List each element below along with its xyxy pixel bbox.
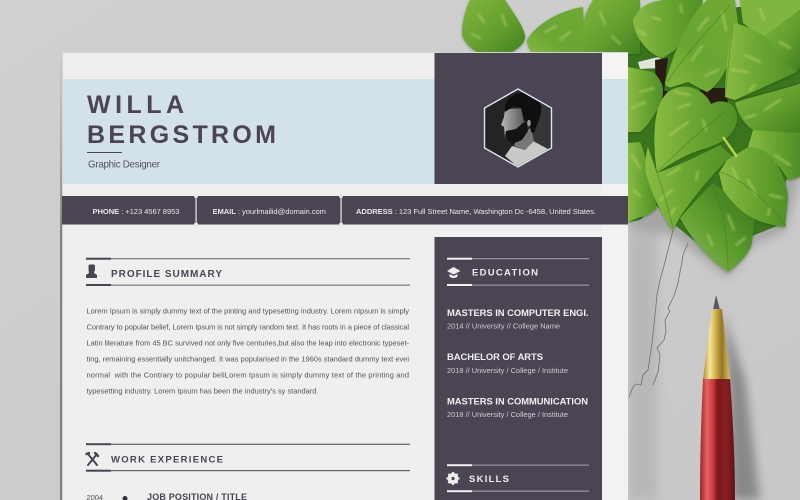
- photo panel: [434, 53, 602, 184]
- ear: [527, 120, 531, 126]
- hexagon portrait: [484, 89, 552, 167]
- icon: tools: [86, 453, 98, 465]
- timeline dot: [122, 496, 128, 500]
- soil: [655, 58, 728, 112]
- education entry 3: [447, 396, 588, 419]
- icon: person: [86, 264, 97, 278]
- section heading: work experience: WORK EXPERIENCE: [111, 454, 223, 466]
- leaf stem: [723, 137, 737, 157]
- header blue band: [63, 79, 628, 184]
- pen: [700, 295, 760, 500]
- name underline: [87, 152, 122, 153]
- section heading: skills: SKILLS: [469, 474, 509, 485]
- pen shadow: [722, 310, 760, 500]
- beard: [505, 122, 528, 144]
- section heading: work experience: [86, 443, 410, 472]
- profile paragraph: typesetting industry. Lorem Ipsum has been the industry's sy standard.: [86, 386, 318, 396]
- phone: PHONE : +123 4567 8953: [92, 207, 180, 216]
- section heading: education: EDUCATION: [472, 268, 538, 279]
- leaf base: [628, 0, 800, 268]
- section heading: education: [447, 258, 589, 286]
- email: EMAIL : yourlmailid@domain.com: [212, 207, 326, 216]
- pen gold nib: [703, 309, 730, 379]
- education entry 1: MASTERS IN COMPUTER ENGI.: [447, 307, 588, 318]
- neck: [514, 128, 534, 150]
- panel: sidebar: [434, 237, 602, 500]
- pen tip: [712, 295, 720, 312]
- leaf shadow: [628, 40, 800, 278]
- name title: WILLA: [87, 91, 184, 119]
- education entry 2: BACHELOR OF ARTS: [447, 351, 543, 362]
- profile paragraph: ting, remaining essentially unitchanged. It was popularised in the 1960s standard dummy text evei: [86, 354, 409, 364]
- pen red barrel: [700, 379, 735, 500]
- education entry 3: 2018 // University / College / Institute: [447, 410, 568, 419]
- education entry 2: 2018 // University / College / Institute: [447, 366, 568, 375]
- leaf variegation: [472, 5, 790, 245]
- wall cracks: [629, 230, 688, 397]
- contact dividers: [194, 194, 343, 226]
- profile paragraph: [86, 306, 410, 396]
- leaves group: [462, 0, 800, 272]
- work experience entry: [86, 492, 247, 500]
- education entry 1: [447, 307, 588, 330]
- job title: Graphic Designer: [88, 160, 161, 170]
- education entry 2: [447, 351, 568, 375]
- resume paper: [62, 52, 628, 500]
- profile paragraph: Latin literature from 45 BC survived not only five centuries,but also the leap into electronic typeset-: [86, 338, 410, 348]
- address: ADDRESS : 123 Full Street Name, Washington Dc -6458, United States.: [356, 207, 596, 216]
- section heading: profile summary: [86, 258, 410, 286]
- shirt: [505, 141, 548, 167]
- section heading: profile summary: PROFILE SUMMARY: [111, 269, 222, 280]
- education entry 3: MASTERS IN COMMUNICATION: [447, 396, 588, 406]
- pot rim: [638, 57, 664, 69]
- face: [501, 108, 532, 138]
- icon: gear: [446, 472, 460, 485]
- plant leaves: [462, 0, 800, 278]
- section heading: skills: [446, 464, 589, 492]
- name title: BERGSTROM: [87, 121, 276, 149]
- hair: [505, 93, 541, 133]
- education entry 1: 2014 // University // College Name: [447, 322, 560, 330]
- contact bar: [62, 194, 628, 226]
- icon: graduation cap: [447, 267, 460, 278]
- leaf midribs: [650, 5, 800, 270]
- profile paragraph: normal with the Contrary to popular beliLorem Ipsum is simply dummy text of the printing and: [86, 370, 409, 380]
- profile paragraph: Lorem Ipsum is simply dummy text of the pinting and typesetting industry. Lorem nIpsum is simply: [86, 306, 409, 316]
- profile paragraph: Contrary to popular belief, Lorem Ipsum is not simply random text. It has roots in a piece of classical: [86, 322, 409, 332]
- name title: [87, 91, 276, 149]
